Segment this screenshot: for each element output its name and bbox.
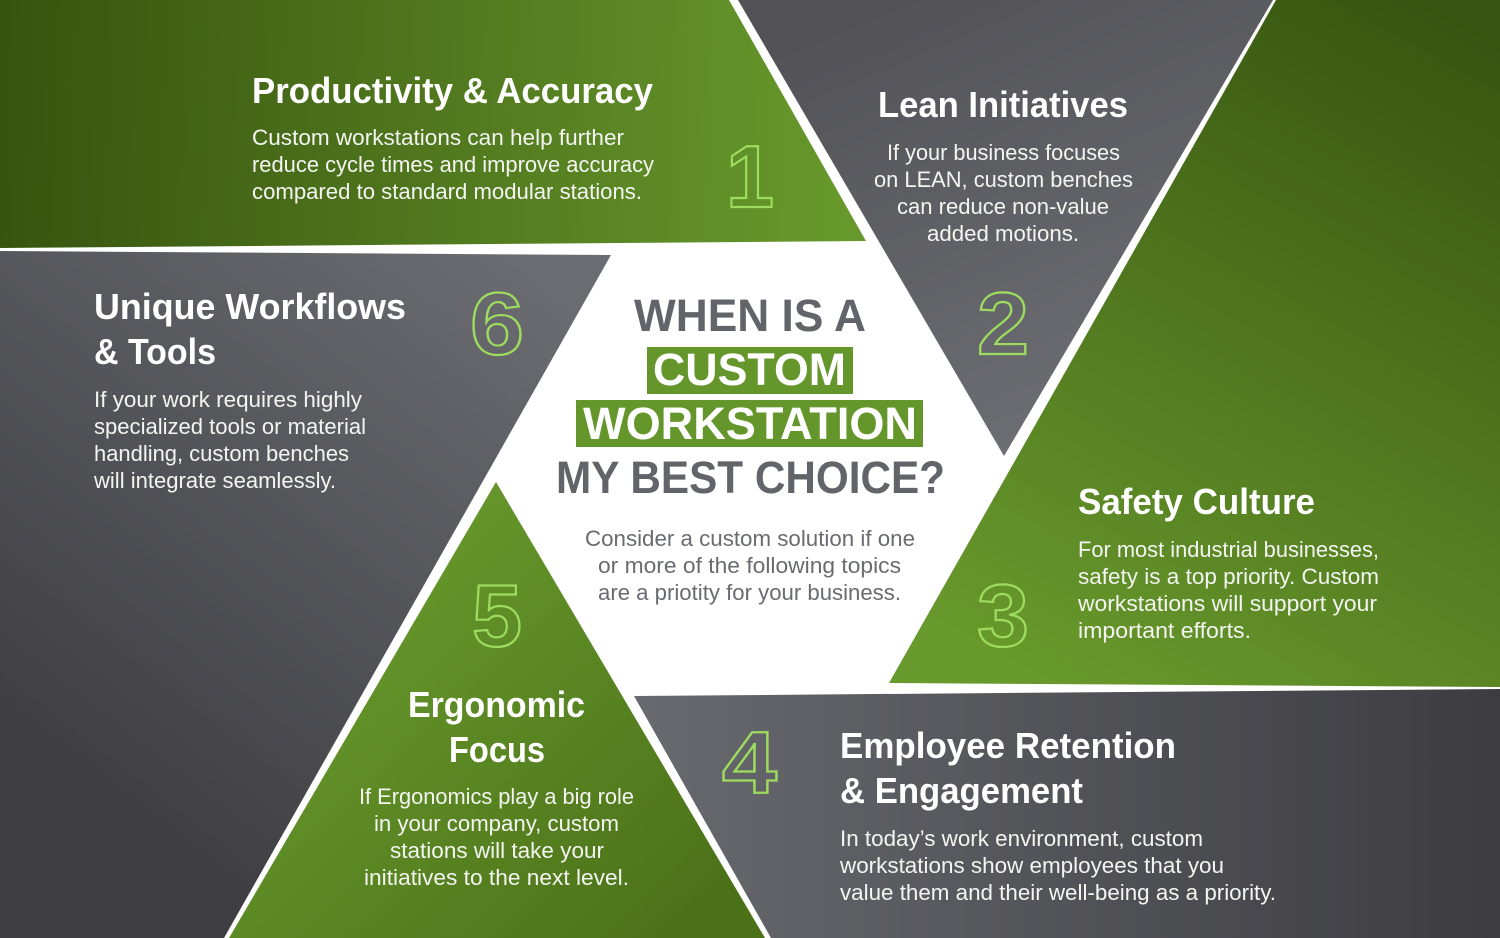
central intro text: Consider a custom solution if one [585,526,915,551]
panel 2 heading: Lean Initiatives [878,84,1128,125]
panel 1: productivity and accuracy [0,0,866,248]
panel 4: employee retention and engagement [634,689,1500,938]
panel 4 body text: value them and their well-being as a priority. [840,880,1276,905]
panel 4 heading: & Engagement [840,770,1083,811]
number 2: 2 [977,274,1029,373]
number 6: 6 [470,274,524,373]
panel 3 heading: Safety Culture [1078,481,1315,522]
panel 4 heading [840,725,1176,811]
highlight: workstation: WORKSTATION [583,398,917,449]
number 3: 3 [977,566,1029,665]
panel 6 heading [94,286,406,372]
central title: MY BEST CHOICE? [556,452,945,503]
panel 4 body text: workstations show employees that you [839,853,1224,878]
central intro text [585,526,915,605]
panel 5: ergonomic focus [229,482,765,938]
panel 2 body text: can reduce non-value [897,194,1109,219]
panel 5 heading [408,684,585,770]
panel 4 body text: In today’s work environment, custom [840,826,1203,851]
panel 3 body text: For most industrial businesses, [1078,537,1379,562]
panel 2: lean initiatives [738,0,1273,456]
central intro text: or more of the following topics [598,553,901,578]
panel 5 body text: If Ergonomics play a big role [359,784,634,809]
panel 6: unique workflows and tools [0,251,611,938]
panel 1 body text: reduce cycle times and improve accuracy [252,152,655,177]
panel 5 heading: Focus [449,729,545,770]
panel 6 body text: specialized tools or material [94,414,366,439]
central intro text: are a priotity for your business. [598,580,901,605]
number 5: 5 [472,566,522,665]
panel 2 body text: on LEAN, custom benches [874,167,1133,192]
panel 5 heading: Ergonomic [408,684,585,725]
central title: WHEN IS A [634,290,866,341]
panel 3: safety culture [889,0,1500,687]
panel 4 body text [839,826,1276,905]
panel 1 heading: Productivity & Accuracy [252,70,653,111]
panel 2 body text [874,140,1133,246]
panel 3 body text: workstations will support your [1077,591,1378,616]
central title [556,290,945,503]
panel 1 body text: compared to standard modular stations. [252,179,642,204]
panel 3 body text [1077,537,1379,643]
panel 5 body text: initiatives to the next level. [364,865,629,890]
panel 2 body text: If your business focuses [887,140,1120,165]
panel 6 body text: will integrate seamlessly. [93,468,336,493]
number 1: 1 [726,127,774,226]
panel 6 body text: If your work requires highly [94,387,363,412]
panel 6 heading: Unique Workflows [94,286,406,327]
highlight: custom: CUSTOM [653,344,846,395]
panel 1 body text: Custom workstations can help further [252,125,625,150]
panel 1 body text [252,125,655,204]
number 4: 4 [722,713,777,812]
panel 6 heading: & Tools [94,331,216,372]
panel 3 body text: safety is a top priority. Custom [1078,564,1379,589]
panel 2 body text: added motions. [927,221,1079,246]
panel 6 body text [93,387,366,493]
panel 4 heading: Employee Retention [840,725,1176,766]
panel 3 body text: important efforts. [1078,618,1251,643]
panel 5 body text [359,784,634,890]
panel 5 body text: in your company, custom [374,811,619,836]
panel 5 body text: stations will take your [390,838,605,863]
panel 6 body text: handling, custom benches [94,441,349,466]
